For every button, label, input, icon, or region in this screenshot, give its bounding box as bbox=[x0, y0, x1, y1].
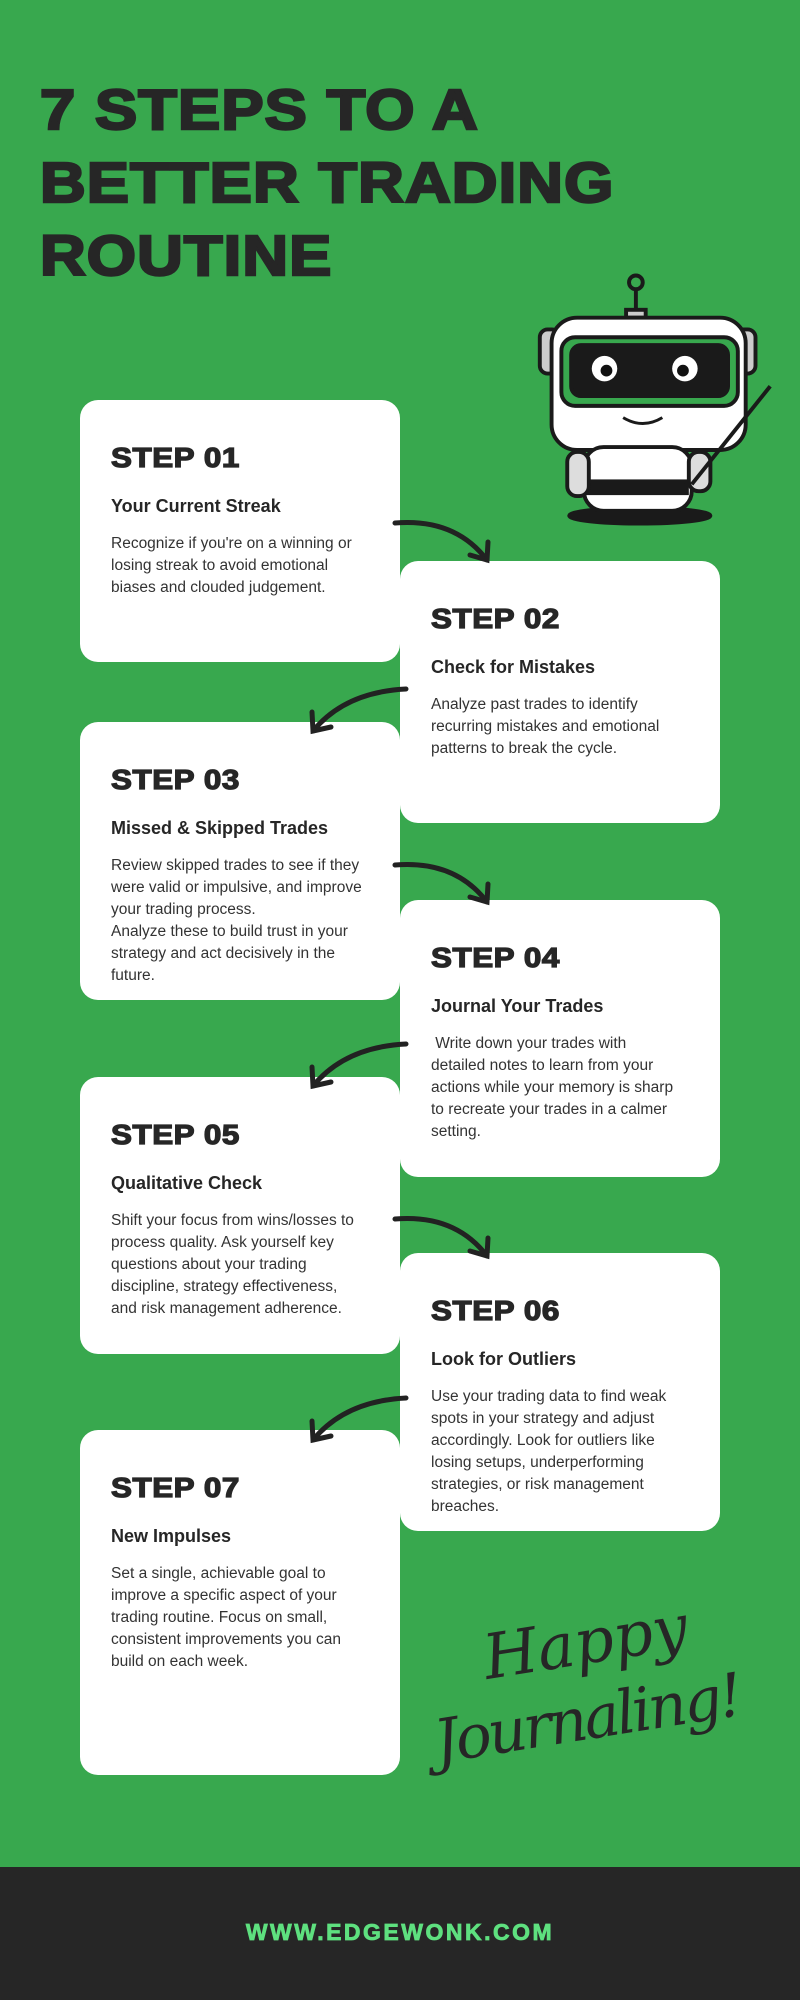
heading 04: Journal Your Trades bbox=[431, 996, 603, 1016]
footer bbox=[0, 1867, 800, 2000]
text 07: Set a single, achievable goal to bbox=[111, 1565, 326, 1582]
panel: step 01 bbox=[80, 400, 400, 662]
step label 03: STEP 03 bbox=[111, 764, 240, 795]
title bbox=[40, 78, 614, 288]
text 06: strategies, or risk management bbox=[431, 1476, 644, 1493]
heading 07: New Impulses bbox=[111, 1526, 231, 1546]
text 04: detailed notes to learn from your bbox=[431, 1057, 653, 1074]
arrow 3 to 4 bbox=[395, 864, 488, 902]
arrow 5 to 6 bbox=[395, 1218, 488, 1256]
text 04: actions while your memory is sharp bbox=[431, 1079, 673, 1096]
text 07: trading routine. Focus on small, bbox=[111, 1609, 327, 1626]
text 01: Recognize if you're on a winning or bbox=[111, 535, 352, 552]
text 03: strategy and act decisively in the bbox=[111, 945, 335, 962]
text 02: patterns to break the cycle. bbox=[431, 740, 617, 757]
text 06: accordingly. Look for outliers like bbox=[431, 1432, 655, 1449]
footer url: WWW.EDGEWONK.COM bbox=[246, 1919, 554, 1945]
text 06: losing setups, underperforming bbox=[431, 1454, 644, 1471]
closing text: Happy Journaling: Happy bbox=[478, 1590, 693, 1694]
text 04: setting. bbox=[431, 1123, 481, 1140]
text 03: Review skipped trades to see if they bbox=[111, 857, 359, 874]
text 05 bbox=[111, 1212, 354, 1317]
text 05: and risk management adherence. bbox=[111, 1300, 342, 1317]
text 02: Analyze past trades to identify bbox=[431, 696, 638, 713]
text 03: Analyze these to build trust in your bbox=[111, 923, 348, 940]
text 01 bbox=[111, 535, 352, 596]
text 03: were valid or impulsive, and improve bbox=[111, 879, 362, 896]
title: ROUTINE bbox=[40, 224, 332, 288]
panel: step 06 bbox=[400, 1253, 720, 1531]
arrow 4 to 5 bbox=[312, 1044, 406, 1086]
text 05: Shift your focus from wins/losses to bbox=[111, 1212, 354, 1229]
heading 02: Check for Mistakes bbox=[431, 657, 595, 677]
closing text: Happy Journaling: Journaling! bbox=[429, 1660, 745, 1778]
text 05: questions about your trading bbox=[111, 1256, 307, 1273]
title: BETTER TRADING bbox=[40, 151, 614, 215]
closing text: Happy Journaling bbox=[429, 1590, 745, 1778]
arrow 6 to 7 bbox=[312, 1398, 406, 1440]
step label 04: STEP 04 bbox=[431, 942, 560, 973]
text 05: process quality. Ask yourself key bbox=[111, 1234, 334, 1251]
text 03: your trading process. bbox=[111, 901, 256, 918]
arrow 1 to 2 bbox=[395, 522, 488, 560]
step label 06: STEP 06 bbox=[431, 1295, 560, 1326]
panel: step 03 bbox=[80, 722, 400, 1000]
step label 07: STEP 07 bbox=[111, 1472, 240, 1503]
title: 7 STEPS TO A bbox=[40, 78, 479, 142]
text 07: improve a specific aspect of your bbox=[111, 1587, 337, 1604]
text 03: future. bbox=[111, 967, 155, 984]
text 03 bbox=[111, 857, 362, 984]
text 07: consistent improvements you can bbox=[111, 1631, 341, 1648]
heading 05: Qualitative Check bbox=[111, 1173, 262, 1193]
panel: step 04 bbox=[400, 900, 720, 1177]
text 01: biases and clouded judgement. bbox=[111, 579, 326, 596]
heading 03: Missed & Skipped Trades bbox=[111, 818, 328, 838]
text 06: Use your trading data to find weak bbox=[431, 1388, 666, 1405]
step label 02: STEP 02 bbox=[431, 603, 560, 634]
text 04: to recreate your trades in a calmer bbox=[431, 1101, 667, 1118]
heading 01: Your Current Streak bbox=[111, 496, 281, 516]
text 07 bbox=[111, 1565, 341, 1670]
panel: step 02 bbox=[400, 561, 720, 823]
text 04: Write down your trades with bbox=[435, 1035, 626, 1052]
text 06: breaches. bbox=[431, 1498, 499, 1515]
step label 01: STEP 01 bbox=[111, 442, 240, 473]
text 06: spots in your strategy and adjust bbox=[431, 1410, 654, 1427]
text 02: recurring mistakes and emotional bbox=[431, 718, 659, 735]
text 06 bbox=[431, 1388, 666, 1515]
text 02 bbox=[431, 696, 659, 757]
panel: step 07 bbox=[80, 1430, 400, 1775]
text 04 bbox=[431, 1035, 673, 1140]
icon: robot mascot bbox=[538, 274, 772, 526]
text 05: discipline, strategy effectiveness, bbox=[111, 1278, 337, 1295]
arrow 2 to 3 bbox=[312, 689, 406, 731]
text 07: build on each week. bbox=[111, 1653, 248, 1670]
step label 05: STEP 05 bbox=[111, 1119, 240, 1150]
text 01: losing streak to avoid emotional bbox=[111, 557, 328, 574]
panel: step 05 bbox=[80, 1077, 400, 1354]
heading 06: Look for Outliers bbox=[431, 1349, 576, 1369]
